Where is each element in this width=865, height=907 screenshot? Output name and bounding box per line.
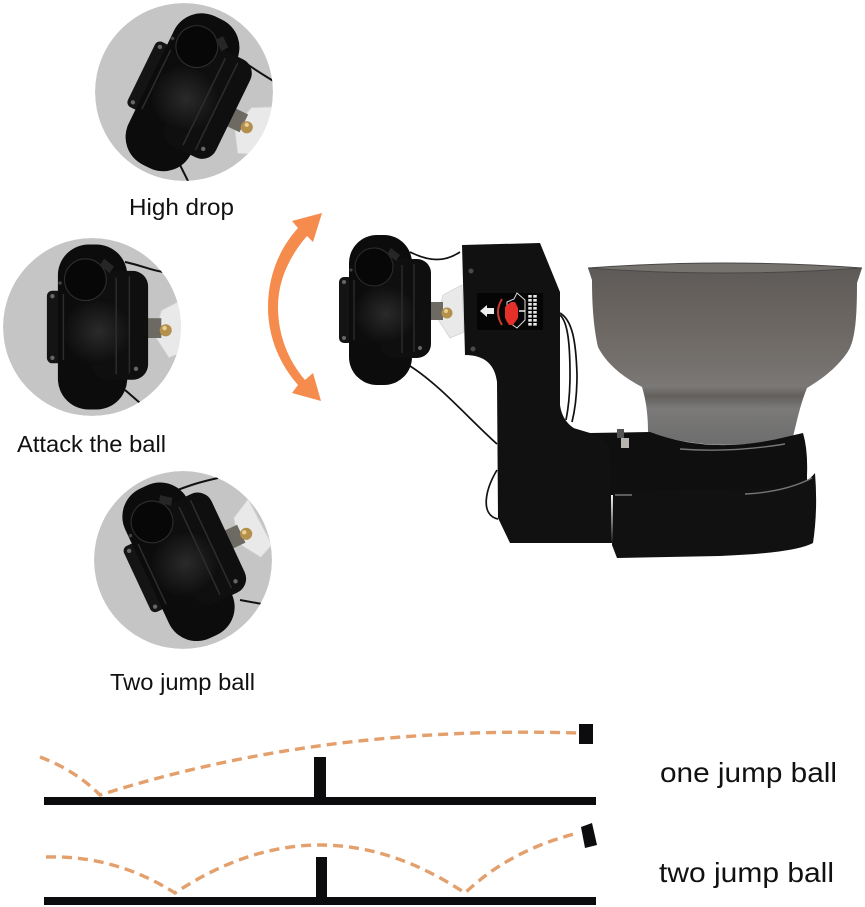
label: two jump ball: two jump ball <box>659 857 834 888</box>
table <box>44 897 596 905</box>
control label <box>477 293 543 330</box>
photo circle: high drop <box>95 3 273 181</box>
net <box>316 857 327 899</box>
panel: two jump ball diagram <box>44 823 834 905</box>
photo circle: attack the ball <box>3 238 184 416</box>
arm screws <box>468 268 476 352</box>
machine head <box>339 235 464 385</box>
paddle <box>579 724 593 744</box>
switch <box>617 429 629 448</box>
label: high drop: High drop <box>129 194 234 220</box>
panel: one jump ball diagram <box>40 724 837 805</box>
panel: two jump ball head position <box>94 471 272 695</box>
panel: high drop head position <box>95 3 273 220</box>
panel: attack the ball head position <box>3 238 184 457</box>
arm <box>462 243 612 543</box>
lower base <box>612 473 816 558</box>
dashed ball path <box>40 732 578 795</box>
net <box>314 757 326 799</box>
machine wires <box>410 252 577 519</box>
photo circle: two jump ball <box>94 471 272 649</box>
dashed ball path <box>46 833 578 893</box>
base highlights <box>615 444 812 495</box>
label: one jump ball: one jump ball <box>660 757 837 788</box>
bowl <box>588 263 862 445</box>
table <box>44 797 596 805</box>
label: two jump ball: Two jump ball <box>110 669 255 695</box>
upper base <box>570 427 807 495</box>
panel: ball machine photo <box>339 235 862 558</box>
bowl rim <box>588 263 862 273</box>
paddle <box>581 823 597 848</box>
label: attack the ball: Attack the ball <box>17 431 166 457</box>
arrow: curved double-headed orange arrow <box>268 213 322 401</box>
